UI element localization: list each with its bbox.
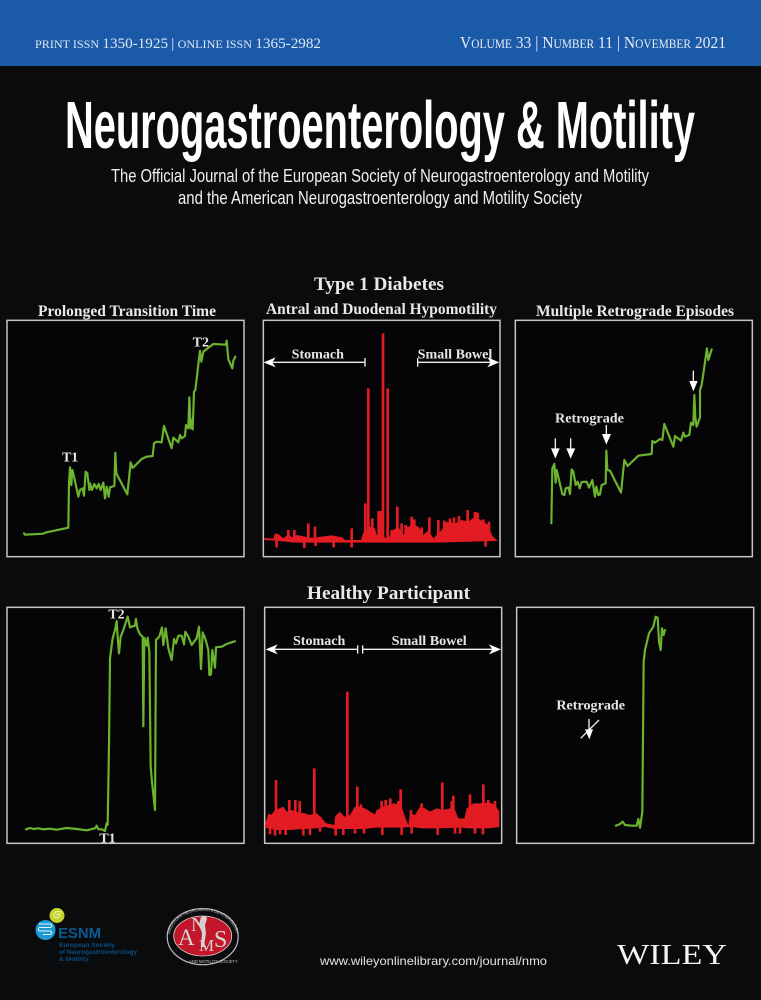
journal subtitle: and the American Neurogastroenterology and Motility Society bbox=[178, 188, 582, 208]
icon: yellow spiral bbox=[50, 908, 64, 923]
logo: ANMS seal bbox=[166, 908, 239, 966]
text: society name: of Neurogastroenterology bbox=[59, 949, 137, 956]
label T2: T2 bbox=[108, 607, 125, 622]
bar trace: red motility bbox=[264, 333, 498, 548]
text: ESNM: ESNM bbox=[58, 926, 101, 942]
publisher: WILEY: WILEY bbox=[617, 939, 727, 971]
logo: ANMS seal: AMERICAN NEUROGASTROENTEROLOGY bbox=[168, 908, 239, 934]
seal letters: M bbox=[199, 936, 214, 955]
journal subtitle bbox=[111, 166, 649, 208]
text: society name: European Society bbox=[59, 942, 115, 949]
icon: blue intestine circle bbox=[36, 920, 56, 940]
label Small Bowel: Small Bowel bbox=[392, 634, 467, 649]
arrow 3 bbox=[602, 425, 611, 445]
ISSN text: PRINT ISSN 1350-1925 | ONLINE ISSN 1365-2982 bbox=[35, 36, 321, 52]
heading: Type 1 Diabetes: Type 1 Diabetes bbox=[314, 274, 444, 295]
label Retrograde: Retrograde bbox=[555, 412, 624, 427]
line chart: green trace bbox=[616, 617, 665, 828]
heading: Prolonged Transition Time: Prolonged Transition Time bbox=[38, 303, 216, 320]
line chart: green trace bbox=[551, 348, 712, 523]
bar trace: red motility bbox=[265, 692, 499, 836]
stomach range arrow bbox=[266, 644, 358, 654]
panel: healthy stomach and small bowel bbox=[265, 607, 502, 843]
panel: healthy retrograde bbox=[517, 607, 754, 843]
website URL: www.wileyonlinelibrary.com/journal/nmo bbox=[319, 954, 547, 968]
journal subtitle: The Official Journal of the European Society of Neurogastroenterology and Motility bbox=[111, 166, 649, 186]
seal ring text bbox=[170, 911, 236, 936]
label Stomach: Stomach bbox=[293, 634, 346, 649]
label Stomach: Stomach bbox=[292, 347, 344, 362]
small bowel range arrow bbox=[418, 357, 499, 367]
small bowel range arrow bbox=[363, 644, 501, 654]
label Retrograde: Retrograde bbox=[556, 698, 625, 713]
logo: ESNM bbox=[36, 908, 137, 963]
seal letters: S bbox=[214, 927, 227, 953]
stomach range arrow bbox=[264, 357, 365, 367]
panel: healthy transition time bbox=[7, 607, 244, 846]
label T1: T1 bbox=[62, 451, 78, 466]
text: society name bbox=[59, 942, 137, 963]
heading: Healthy Participant: Healthy Participant bbox=[307, 583, 471, 604]
arrow 1 bbox=[551, 438, 560, 459]
line chart: green trace bbox=[26, 617, 235, 831]
crossed arrow bbox=[581, 719, 599, 739]
seal letters: A bbox=[178, 925, 195, 950]
seal letters: N bbox=[191, 914, 205, 936]
label T2: T2 bbox=[193, 336, 209, 351]
arrow 4 bbox=[689, 371, 698, 391]
issue information: VOLUME 33 | NUMBER 11 | NOVEMBER 2021 bbox=[460, 33, 726, 52]
header band bbox=[0, 0, 761, 66]
panel: prolonged transition time bbox=[7, 320, 244, 557]
label Small Bowel: Small Bowel bbox=[418, 347, 492, 362]
panel: multiple retrograde episodes bbox=[515, 320, 752, 557]
label T1: T1 bbox=[99, 831, 116, 846]
logo: ANMS seal: AND MOTILITY SOCIETY bbox=[189, 959, 238, 964]
text: society name: & Motility bbox=[59, 956, 89, 963]
arrow 2 bbox=[566, 438, 575, 459]
line chart: green trace bbox=[24, 341, 235, 535]
panel: antral and duodenal hypomotility bbox=[263, 320, 500, 557]
seal letters bbox=[178, 914, 227, 955]
heading: Antral and Duodenal Hypomotility: Antral and Duodenal Hypomotility bbox=[266, 301, 497, 318]
heading: Multiple Retrograde Episodes: Multiple Retrograde Episodes bbox=[536, 303, 734, 320]
